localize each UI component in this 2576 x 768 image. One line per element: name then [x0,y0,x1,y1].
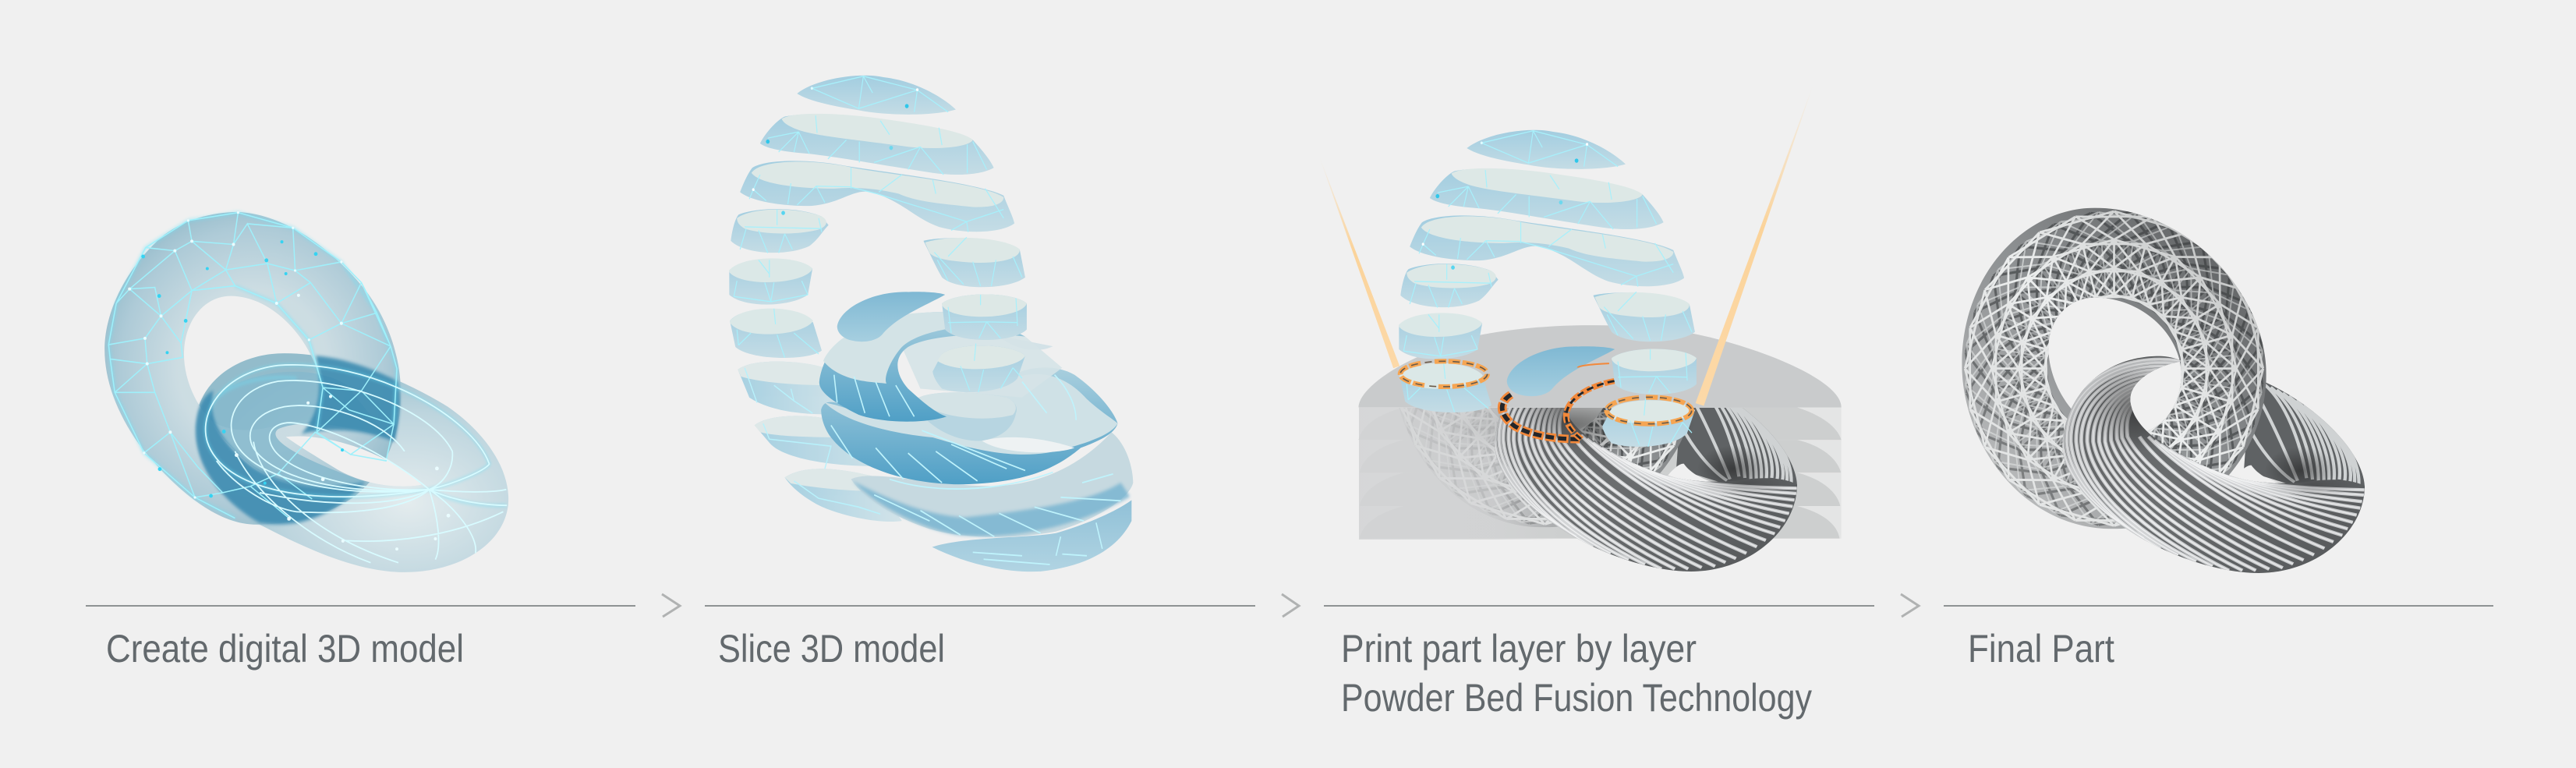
slice E small [916,392,1017,441]
slice B large [821,367,1118,484]
slice 1 top cap [797,76,956,115]
spiral lines on lower torus [206,365,507,563]
caption: powder bed fusion: Powder Bed Fusion Technology [1341,676,1812,720]
slice B opening [982,437,1074,452]
slice A top face [823,312,997,384]
cyan dots [141,240,344,497]
caption: slice 3D model: Slice 3D model [718,627,945,671]
illustration: sliced torus knot [729,76,1133,572]
divider line 3 [1324,605,1874,607]
mesh glow [108,213,506,518]
slice 5 left [729,258,812,305]
slice A large [819,312,1025,422]
panel: print part layer by layer [1318,81,1874,720]
twisted torus back section [2235,380,2365,494]
sliced model above bed [1399,130,1697,447]
layer 1 dome [1358,325,1842,407]
blue crescent [837,292,945,342]
illustration: transparent mesh torus knot [104,211,508,572]
overlap: left dark band [196,391,366,524]
panel: create digital 3D model [86,211,635,671]
layer 5 [1360,506,1839,539]
illustration: metal knot [1962,207,2365,573]
divider line 4 [1944,605,2493,607]
slice 6 left [730,309,822,358]
slice 3 long [740,161,1014,232]
left laser beam [1318,154,1399,368]
lattice torus [1937,181,2292,556]
slice 8 left [755,416,896,466]
layer bands [1359,407,1842,539]
faint right wing [994,334,1053,350]
divider line 2 [705,605,1255,607]
powder veil over lattice [1359,407,1842,540]
lattice part under powder [1399,408,1797,527]
slice C large [851,432,1133,537]
lower torus body [195,353,508,572]
caption: create digital 3D model: Create digital 3D model [106,627,464,671]
twisted torus front section [2059,353,2369,577]
melt ring right [1607,397,1692,424]
slice C blue edges [853,481,1130,536]
overlap: right dark band [301,356,400,442]
caption: print part: Print part layer by layer [1341,627,1697,671]
lower slices [738,312,1133,572]
layer 4 [1360,472,1840,506]
slice 9 left [785,469,902,522]
laser beams and melt rings [1318,81,1814,439]
right laser beam [1696,81,1814,405]
slice B top face [825,374,1118,455]
right slice 4 [932,344,1025,392]
streak lines on lower slices [831,375,1121,564]
slice A inner fill [902,332,1062,398]
polygon mesh lines on upper torus [108,213,397,518]
slice 2 [760,114,994,175]
arrow 1 [662,594,680,617]
melt ring left [1400,361,1488,387]
twisted part [1495,408,1797,572]
slice right 2 [923,237,1025,287]
layer 2 [1358,407,1842,440]
layer 3 [1360,440,1841,472]
panel: slice 3D model [705,76,1255,671]
arrow 3 [1901,594,1919,617]
caption: final part: Final Part [1968,627,2114,671]
divider line 1 [86,605,635,607]
slice 4 left [731,209,829,253]
inner surface of lower torus [207,372,389,488]
slice D bottom [932,500,1131,572]
glowing lines on left slices [745,368,880,514]
hole background [286,437,422,487]
melt arc outer twist [1502,395,1580,439]
upper torus body [104,212,401,525]
upper arch of slices [729,76,1027,392]
slice right 3 [942,294,1027,340]
panel: final part [1937,181,2493,671]
slice 7 left [738,362,847,414]
powder bed layers [1358,325,1842,539]
arrow 2 [1282,594,1299,617]
melt arc inner twist [1566,363,1615,439]
mesh nodes [128,211,450,550]
